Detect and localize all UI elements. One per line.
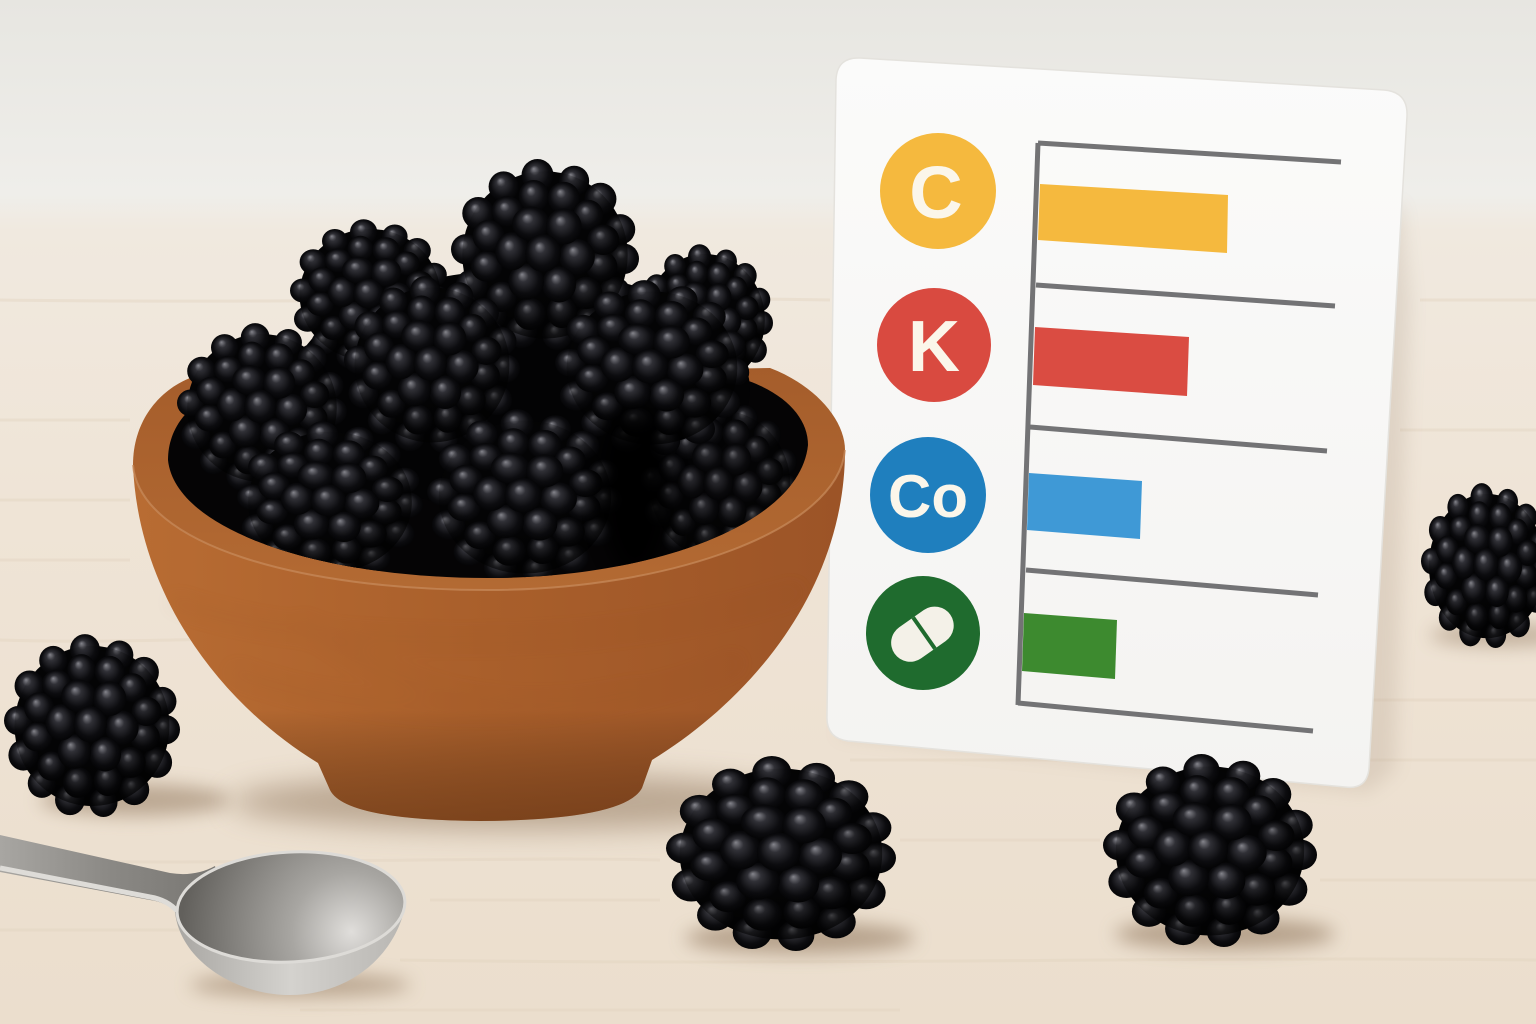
bowl interior — [168, 370, 808, 578]
card shadow — [835, 200, 1410, 792]
blackberry: right loose — [1103, 754, 1335, 950]
bar: green — [1022, 613, 1117, 679]
blackberries in bowl — [177, 159, 800, 584]
icon: cobalt badge — [870, 437, 986, 553]
wood grain — [170, 590, 800, 710]
dark backing — [306, 274, 750, 382]
shadow between berries — [600, 405, 670, 575]
bowl body — [133, 450, 845, 821]
wooden bowl — [133, 368, 845, 821]
bar: red — [1033, 327, 1189, 396]
bar: yellow — [1038, 184, 1228, 253]
nutrient card — [827, 58, 1410, 792]
bar chart — [1018, 143, 1341, 731]
bar: blue — [1027, 473, 1142, 539]
metal spoon — [0, 835, 410, 997]
spoon handle — [0, 835, 225, 912]
card face — [827, 58, 1407, 787]
icon: vitamin K badge — [877, 288, 991, 402]
icon: cobalt badge: Co — [888, 463, 968, 530]
blackberry: far right — [1421, 483, 1536, 648]
blackberry: center loose — [666, 756, 915, 954]
bowl shadow — [230, 774, 810, 830]
bowl rim — [133, 368, 845, 590]
spoon cup — [175, 903, 406, 995]
blackberry: left loose — [4, 634, 230, 817]
icon: supplement capsule badge — [866, 576, 980, 690]
spoon interior — [174, 846, 408, 968]
icon: vitamin K badge: K — [908, 307, 960, 387]
icon: vitamin C badge — [880, 133, 996, 249]
icon: vitamin C badge: C — [909, 151, 963, 234]
